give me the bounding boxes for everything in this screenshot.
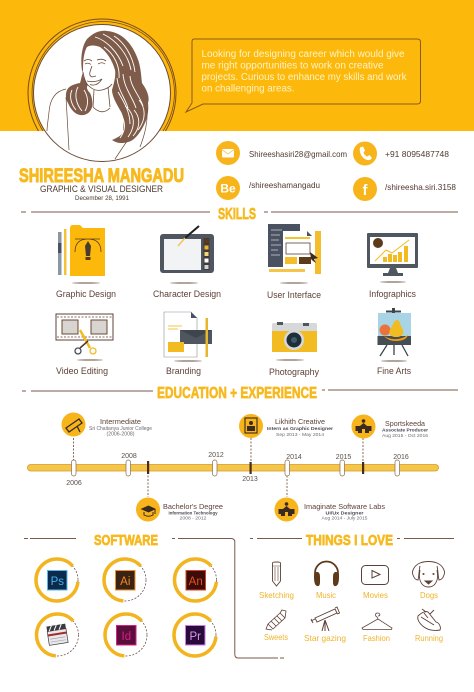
header band — [0, 0, 474, 131]
software heading — [24, 533, 284, 658]
name block: GRAPHIC & VISUAL DESIGNER — [40, 184, 163, 194]
love: movies — [362, 566, 388, 600]
hair — [66, 31, 149, 143]
milestone: bachelor's degree — [136, 498, 223, 522]
speech bubble: me right opportunities to work on creative — [202, 60, 384, 72]
contact: email — [216, 141, 347, 165]
skill: video editing: Video Editing — [56, 366, 108, 376]
name block — [19, 165, 184, 202]
skill: character design: Character Design — [153, 289, 221, 299]
contact: phone — [353, 142, 449, 166]
skill: branding: Branding — [166, 366, 201, 376]
things i love heading: THINGS I LOVE — [306, 533, 393, 549]
contact: phone: +91 8095487748 — [385, 149, 449, 159]
skill: branding — [164, 312, 212, 376]
milestone: intermediate: Sri Chaitanya Junior College — [89, 426, 152, 432]
software heading: SOFTWARE — [94, 533, 158, 549]
skill: photography: Photography — [269, 367, 319, 377]
milestone: sportskeeda: Associate Producer — [382, 428, 428, 434]
milestone: likhith creative: Sep 2013 - May 2014 — [276, 432, 324, 438]
skill: graphic design — [56, 225, 116, 299]
shoulders and dress lines — [47, 89, 147, 159]
contact: email: Shireeshasiri28@gmail.com — [249, 149, 347, 159]
software: indesign: Id — [122, 631, 131, 643]
software: indesign — [105, 614, 147, 656]
skill: graphic design: Graphic Design — [56, 289, 116, 299]
speech bubble: on challenging areas. — [202, 84, 294, 94]
milestone: likhith creative — [239, 414, 333, 438]
love: fashion — [362, 613, 392, 643]
milestone: intermediate — [62, 412, 152, 438]
speech bubble: projects. Curious to enhance my skills and work — [202, 72, 407, 83]
contact: behance: /shireeshamangadu — [249, 180, 320, 190]
contact: facebook: /shireesha.siri.3158 — [385, 182, 456, 192]
milestone: intermediate: (2006-2008) — [106, 432, 135, 438]
speech bubble — [186, 39, 420, 112]
love: music: Music — [316, 590, 337, 600]
software: premiere — [174, 614, 216, 656]
milestone: bachelor's degree: 2008 - 2012 — [180, 516, 207, 522]
timeline: 2016 — [393, 454, 409, 461]
love: fashion: Fashion — [363, 633, 390, 643]
love: sketching: Sketching — [259, 590, 294, 600]
contact: facebook — [353, 177, 456, 201]
skill: fine arts: Fine Arts — [377, 366, 411, 376]
love: movies: Movies — [363, 590, 388, 600]
love: sweets: Sweets — [264, 632, 288, 642]
milestone: bachelor's degree: Bachelor's Degree — [163, 502, 223, 511]
software: illustrator: Ai — [120, 576, 130, 588]
milestone: imaginate software labs: Imaginate Software Labs — [304, 502, 385, 511]
software: premiere: Pr — [189, 631, 201, 643]
milestone: likhith creative: Intern as Graphic Designer — [267, 426, 333, 432]
name block: SHIREESHA MANGADU — [19, 165, 184, 187]
contact: behance — [216, 176, 320, 200]
love: running — [415, 609, 443, 643]
timeline: 2008 — [121, 453, 137, 460]
software: illustrator — [104, 559, 146, 601]
timeline: 2014 — [286, 454, 302, 461]
name block: December 28, 1991 — [75, 195, 129, 202]
skill: user interface: User Interface — [267, 290, 321, 300]
skill: video editing — [56, 314, 113, 376]
love: dogs — [412, 562, 445, 600]
milestone: sportskeeda: Aug 2015 - Oct 2016 — [382, 433, 428, 439]
portrait — [28, 19, 176, 162]
milestone: bachelor's degree: Information Technology — [168, 510, 218, 516]
milestone: sportskeeda: Sportskeeda — [385, 419, 426, 428]
love: star gazing — [304, 607, 346, 643]
skill: fine arts — [377, 308, 411, 376]
love: sketching — [259, 562, 294, 600]
love: dogs: Dogs — [420, 590, 438, 600]
timeline — [28, 438, 438, 497]
milestone: imaginate software labs: UI/Ux Designer — [326, 510, 364, 516]
love: music — [314, 562, 339, 600]
speech bubble: Looking for designing career which would give — [202, 49, 405, 60]
skill: user interface — [267, 224, 321, 300]
software: animate — [174, 559, 216, 601]
timeline: 2006 — [66, 480, 82, 487]
contact: facebook: f — [362, 182, 368, 199]
software: photoshop — [36, 559, 78, 601]
timeline: 2015 — [336, 454, 351, 461]
milestone: imaginate software labs: Aug 2014 - July 2015 — [322, 516, 368, 522]
timeline: 2012 — [208, 452, 224, 459]
milestone: sportskeeda — [352, 414, 428, 439]
education and experience heading: EDUCATION + EXPERIENCE — [157, 385, 317, 402]
love: running: Running — [415, 633, 443, 643]
skill: infographics — [367, 233, 418, 299]
skills heading: SKILLS — [218, 206, 256, 223]
milestone: intermediate: Intermediate — [100, 417, 141, 426]
timeline: 2013 — [242, 476, 258, 483]
contact: behance: Be — [220, 182, 236, 196]
skill: character design — [153, 226, 221, 299]
software: animate: An — [189, 576, 203, 588]
face — [83, 59, 112, 112]
skill: photography — [269, 322, 319, 377]
skill: infographics: Infographics — [369, 289, 416, 299]
software: photoshop: Ps — [51, 576, 64, 588]
love: star gazing: Star gazing — [304, 633, 346, 643]
love: sweets — [264, 610, 288, 642]
milestone: imaginate software labs — [274, 498, 385, 522]
software: final cut — [36, 614, 78, 656]
milestone: likhith creative: Likhith Creative — [275, 417, 325, 426]
